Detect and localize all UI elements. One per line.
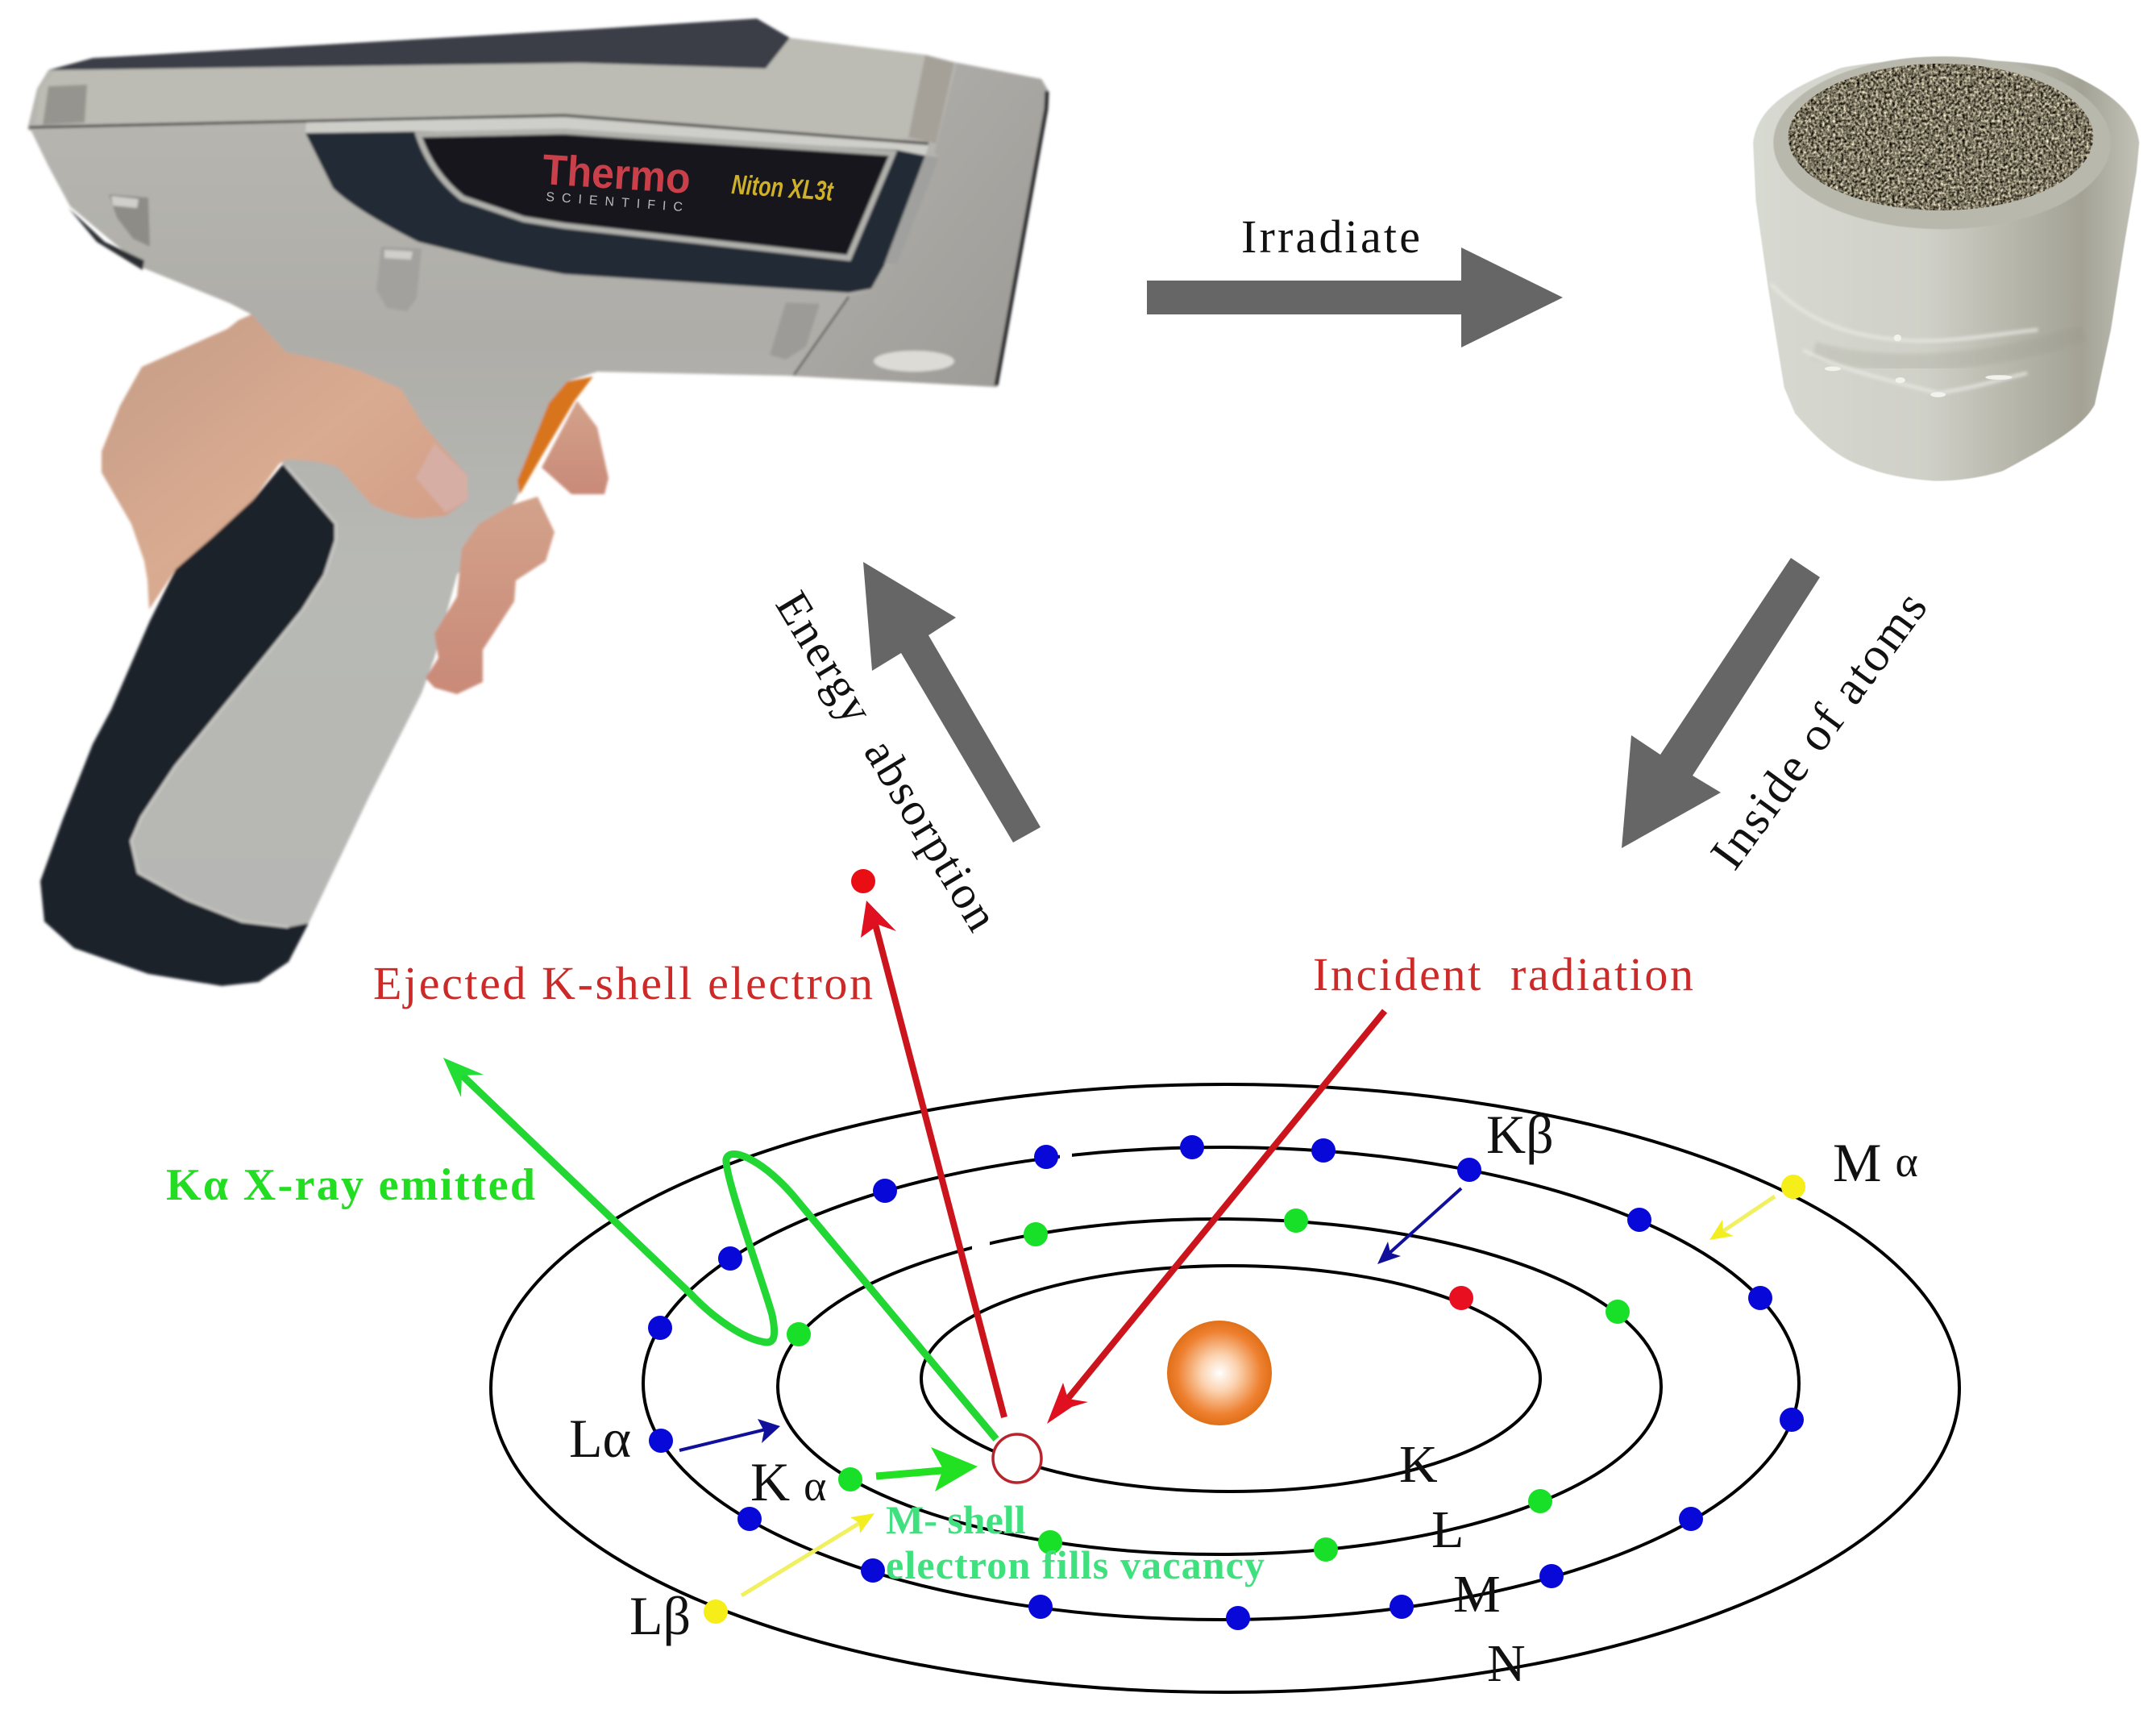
label: Incident radiation: Incident radiation — [1313, 948, 1693, 1001]
nucleus — [1167, 1321, 1272, 1425]
label: Niton XL3t: Niton XL3t — [730, 169, 835, 207]
label: Inside of atoms: Inside of atoms — [1700, 581, 1937, 879]
label: Ejected K-shell electron: Ejected K-shell electron — [373, 957, 873, 1009]
photo: sample cup with powder — [1753, 56, 2139, 481]
arrow: energy absorption — [863, 562, 1041, 842]
label: M-shell electron fills vacancy: electron fills vacancy — [886, 1542, 1265, 1587]
arrow: L to K fill green — [876, 1447, 978, 1491]
label: shell N: N — [1487, 1634, 1526, 1693]
label: shell M: M — [1453, 1565, 1501, 1624]
arrow: incident radiation — [1047, 1011, 1385, 1424]
label: K beta: Kβ — [1486, 1104, 1554, 1165]
arrow: inside of atoms — [1622, 558, 1820, 848]
shell: N — [491, 1084, 1959, 1692]
label: L alpha: Lα — [569, 1408, 631, 1469]
vacancy — [993, 1434, 1041, 1483]
electron: K shell red — [1449, 1286, 1473, 1310]
electrons: M shell blue — [648, 1135, 1804, 1630]
arrow: irradiate — [1147, 248, 1563, 347]
arrow: K-alpha X-ray wave — [443, 1058, 996, 1439]
arrow: M alpha yellow — [1709, 1196, 1775, 1240]
diagram: atom shell model — [443, 869, 1959, 1692]
arrow: K beta blue — [1377, 1188, 1461, 1264]
electrons: L shell green — [787, 1209, 1630, 1562]
label: K-alpha X-ray emitted: Kα X-ray emitted — [166, 1160, 535, 1210]
label: Scientific: SCIENTIFIC — [546, 190, 683, 214]
label: Energy absorption: Energy absorption — [766, 582, 1009, 939]
label: Thermo logo: Thermo — [541, 146, 692, 203]
photo: handheld XRF analyzer held in hand — [27, 19, 1049, 986]
label: K alpha: K α — [750, 1451, 826, 1512]
shell: K — [921, 1266, 1540, 1491]
shell: L — [778, 1219, 1661, 1554]
label: L beta: Lβ — [629, 1585, 691, 1646]
arrow: L alpha blue — [679, 1419, 780, 1450]
label: M alpha: α — [1895, 1138, 1918, 1186]
arrow: L beta yellow — [742, 1513, 874, 1595]
label: M alpha: M — [1833, 1132, 1881, 1193]
label: M-shell electron fills vacancy: M- shell — [886, 1497, 1026, 1542]
label: Irradiate: Irradiate — [1241, 210, 1420, 263]
ejected electron — [851, 869, 875, 893]
arrow: ejected electron — [861, 901, 1004, 1417]
label: shell K: K — [1399, 1435, 1438, 1494]
shell: M — [643, 1147, 1799, 1620]
electrons: yellow — [704, 1175, 1805, 1624]
label: shell L: L — [1431, 1500, 1464, 1559]
